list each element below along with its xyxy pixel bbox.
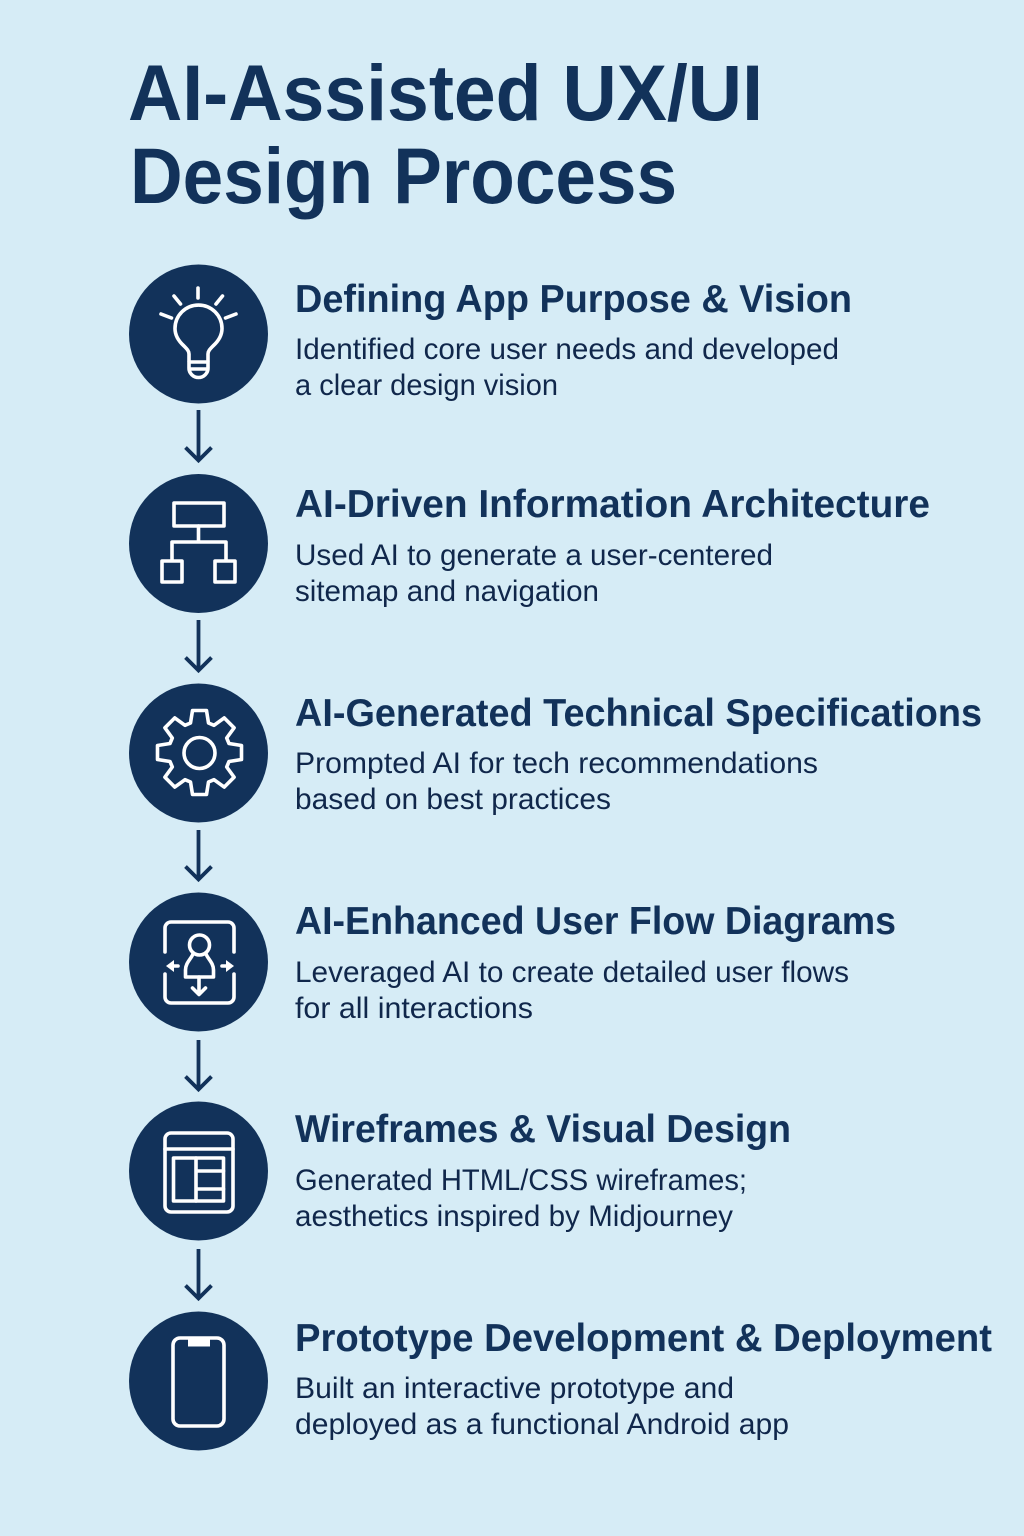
step 4: user flow diagrams [129, 892, 896, 1032]
arrow 4 [186, 1040, 212, 1090]
title: Design Process [130, 131, 677, 220]
icon: smartphone [129, 1312, 268, 1450]
heading: AI-Driven Information Architecture [295, 483, 930, 526]
icon: sitemap [129, 474, 268, 613]
step 1: defining app purpose and vision [129, 264, 852, 404]
icon: light bulb [129, 264, 268, 404]
title [128, 48, 763, 220]
arrow 1 [186, 410, 212, 460]
heading: Wireframes & Visual Design [295, 1108, 791, 1151]
arrow 2 [186, 620, 212, 670]
step 5: wireframes and visual design [129, 1102, 791, 1240]
step 2: information architecture [129, 474, 930, 613]
description [295, 956, 849, 1025]
description: Built an interactive prototype and [295, 1372, 734, 1405]
icon: wireframe layout [129, 1102, 268, 1240]
description [295, 1164, 747, 1233]
arrow 3 [186, 830, 212, 880]
description [295, 539, 773, 608]
icon: gear [129, 684, 268, 822]
description: Generated HTML/CSS wireframes; [295, 1164, 747, 1197]
description: Used AI to generate a user-centered [295, 539, 773, 572]
icon: user flow [129, 892, 268, 1032]
description [295, 747, 818, 816]
description: Leveraged AI to create detailed user flows [295, 956, 849, 989]
description: for all interactions [295, 992, 533, 1025]
description [295, 333, 839, 402]
step 6: prototype development and deployment [129, 1312, 992, 1450]
description: a clear design vision [295, 369, 558, 402]
description: sitemap and navigation [295, 575, 599, 608]
description: aesthetics inspired by Midjourney [295, 1200, 733, 1233]
title: AI-Assisted UX/UI [128, 48, 763, 137]
heading: AI-Generated Technical Specifications [295, 692, 982, 735]
arrow 5 [186, 1249, 212, 1299]
description: based on best practices [295, 783, 611, 816]
heading: Defining App Purpose & Vision [295, 278, 852, 321]
heading: Prototype Development & Deployment [295, 1317, 992, 1360]
description: Identified core user needs and developed [295, 333, 839, 366]
description [295, 1372, 789, 1441]
heading: AI-Enhanced User Flow Diagrams [295, 900, 896, 943]
step 3: technical specifications [129, 684, 982, 822]
description: deployed as a functional Android app [295, 1408, 789, 1441]
description: Prompted AI for tech recommendations [295, 747, 818, 780]
